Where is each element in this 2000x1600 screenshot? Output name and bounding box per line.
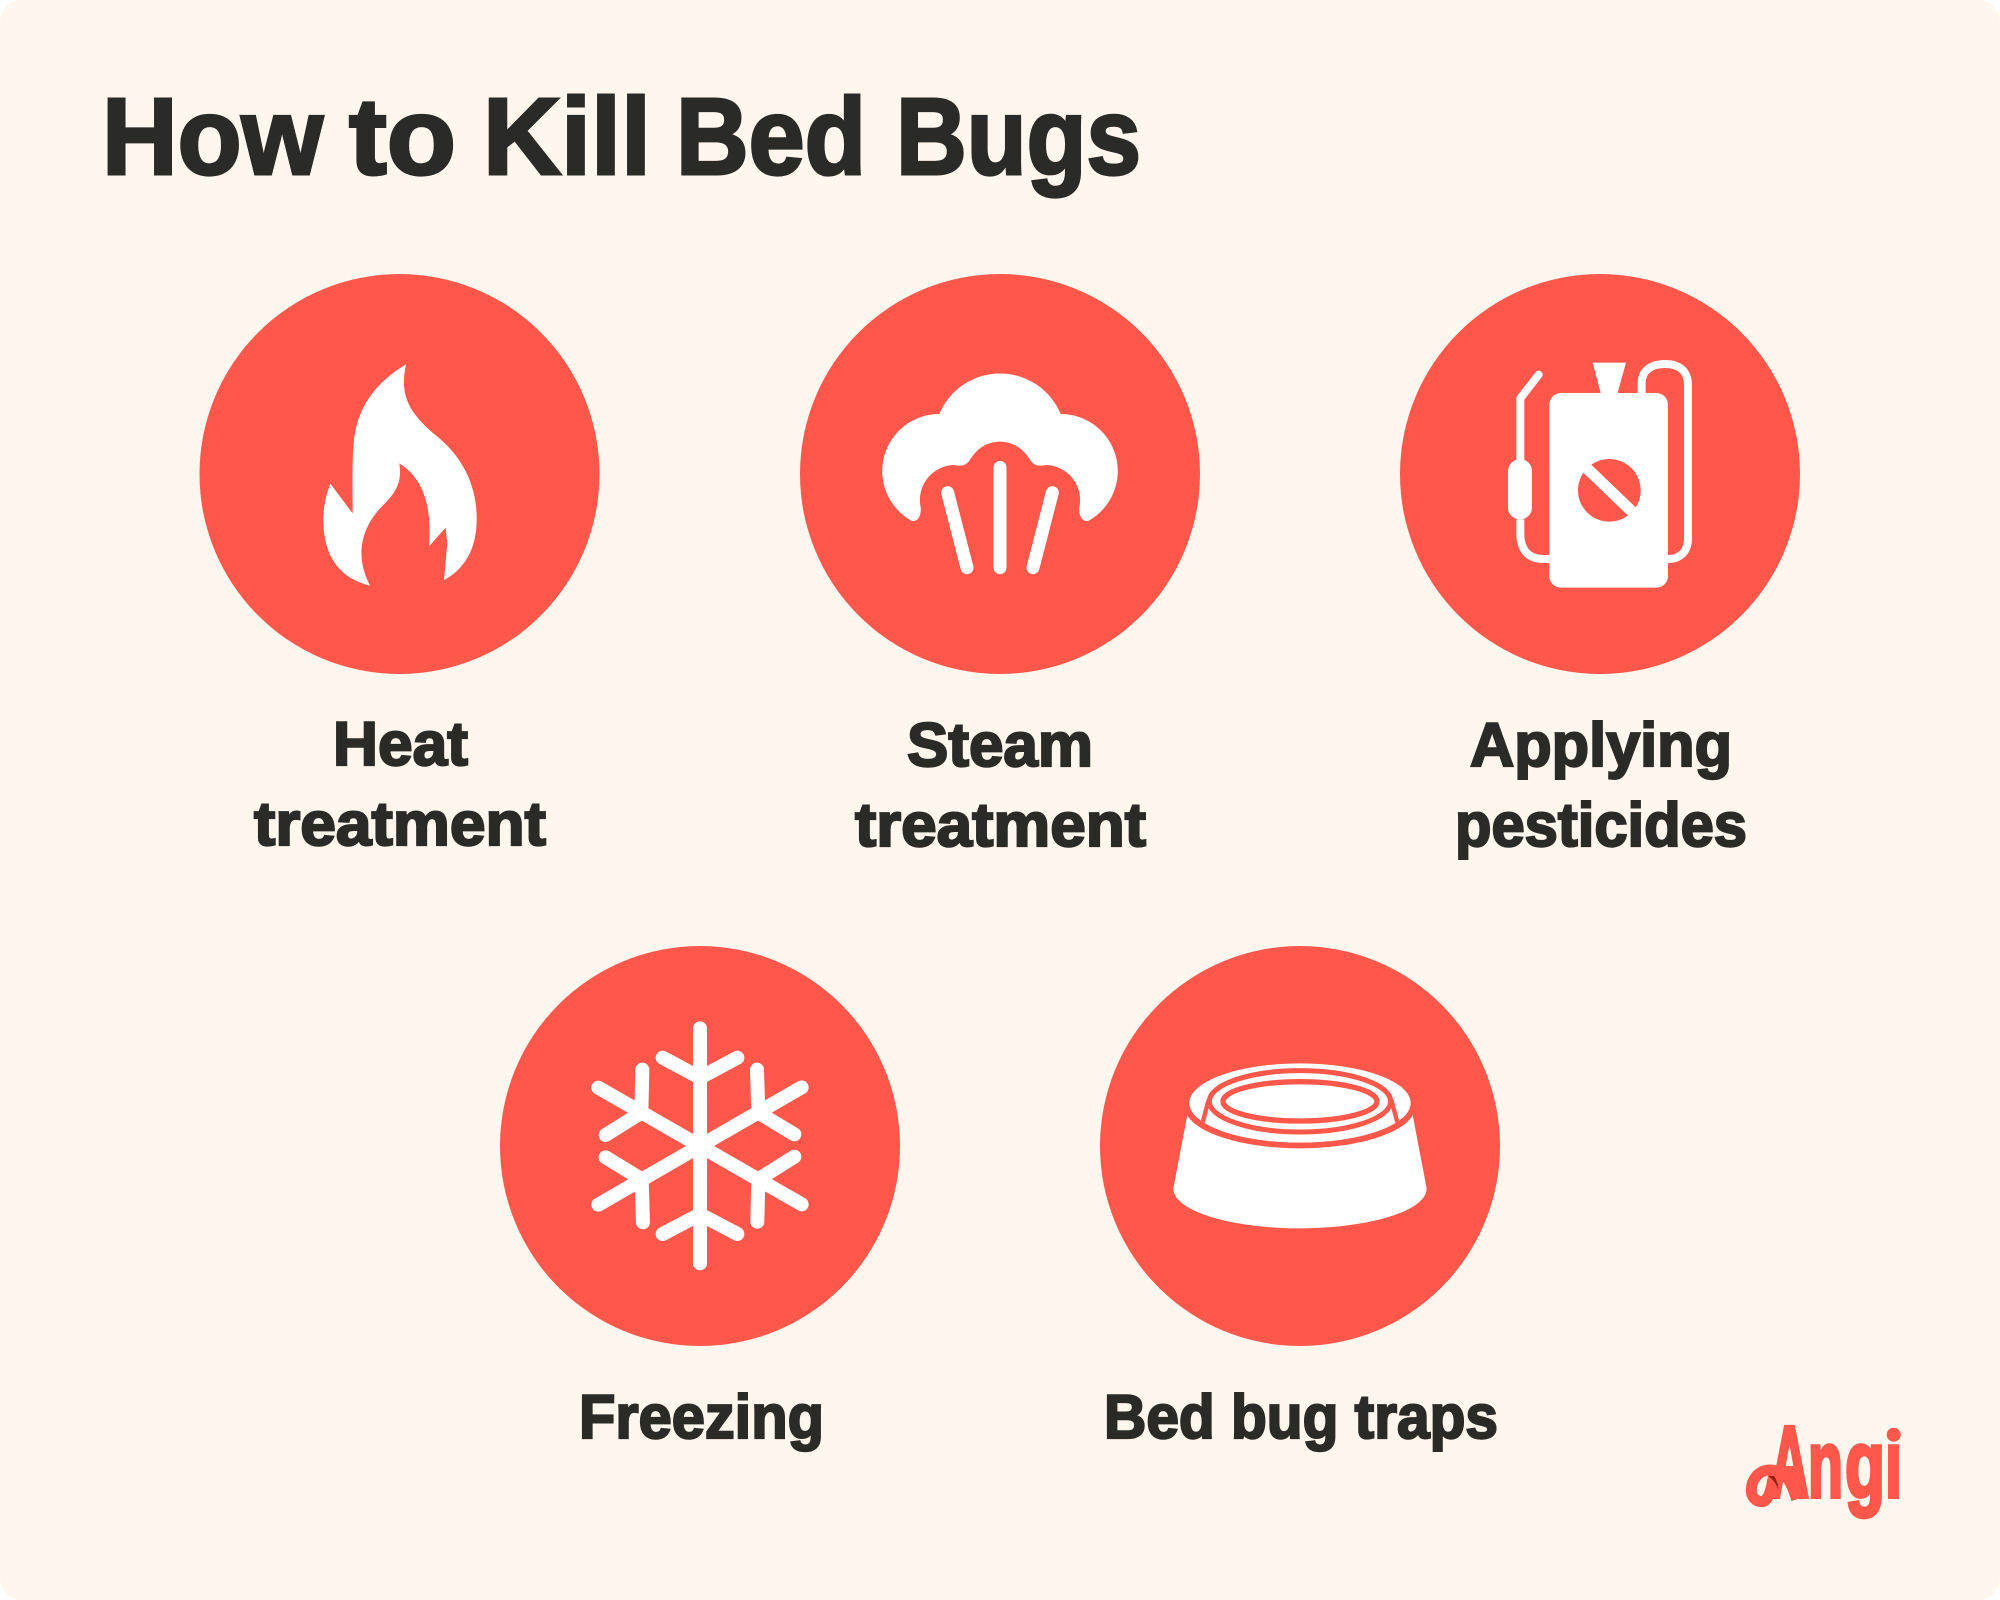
label: bed bug traps: Bed bug traps (1104, 1383, 1498, 1452)
logo: Angi: A (1770, 1405, 1809, 1519)
label: heat treatment (254, 710, 546, 859)
label: steam treatment: treatment (855, 791, 1146, 860)
label: freezing: Freezing (579, 1383, 824, 1452)
title: Bed (676, 76, 866, 198)
title: How (102, 76, 323, 198)
panel: steam treatment (800, 274, 1200, 860)
logo: Angi: g (1845, 1411, 1885, 1518)
icon: steam cloud (882, 373, 1118, 568)
circle: traps (1100, 946, 1500, 1346)
logo: Angi (1751, 1405, 1906, 1519)
label: steam treatment: Steam (907, 711, 1093, 780)
label: applying pesticides: pesticides (1455, 791, 1747, 860)
title: Bugs (896, 76, 1141, 198)
panel: freezing (500, 946, 900, 1452)
title: to (349, 76, 456, 198)
label: applying pesticides (1455, 711, 1747, 860)
label: heat treatment: Heat (333, 710, 468, 779)
panel: heat treatment (200, 274, 600, 859)
icon: flame (323, 364, 477, 586)
panel: applying pesticides (1400, 274, 1800, 860)
circle: freezing (500, 946, 900, 1346)
icon: interceptor trap (1173, 1063, 1427, 1228)
circle: heat (200, 274, 600, 674)
title: Kill (483, 76, 651, 198)
circle: pesticides (1400, 274, 1800, 674)
logo: Angi: i (1885, 1411, 1902, 1518)
label: heat treatment: treatment (254, 790, 546, 859)
label: applying pesticides: Applying (1470, 711, 1732, 780)
icon: backpack sprayer (1508, 363, 1688, 588)
icon: snowflake (598, 1028, 802, 1263)
label: steam treatment (855, 711, 1146, 860)
logo: Angi: n (1808, 1411, 1843, 1518)
panel: bed bug traps (1100, 946, 1500, 1452)
circle: steam (800, 274, 1200, 674)
